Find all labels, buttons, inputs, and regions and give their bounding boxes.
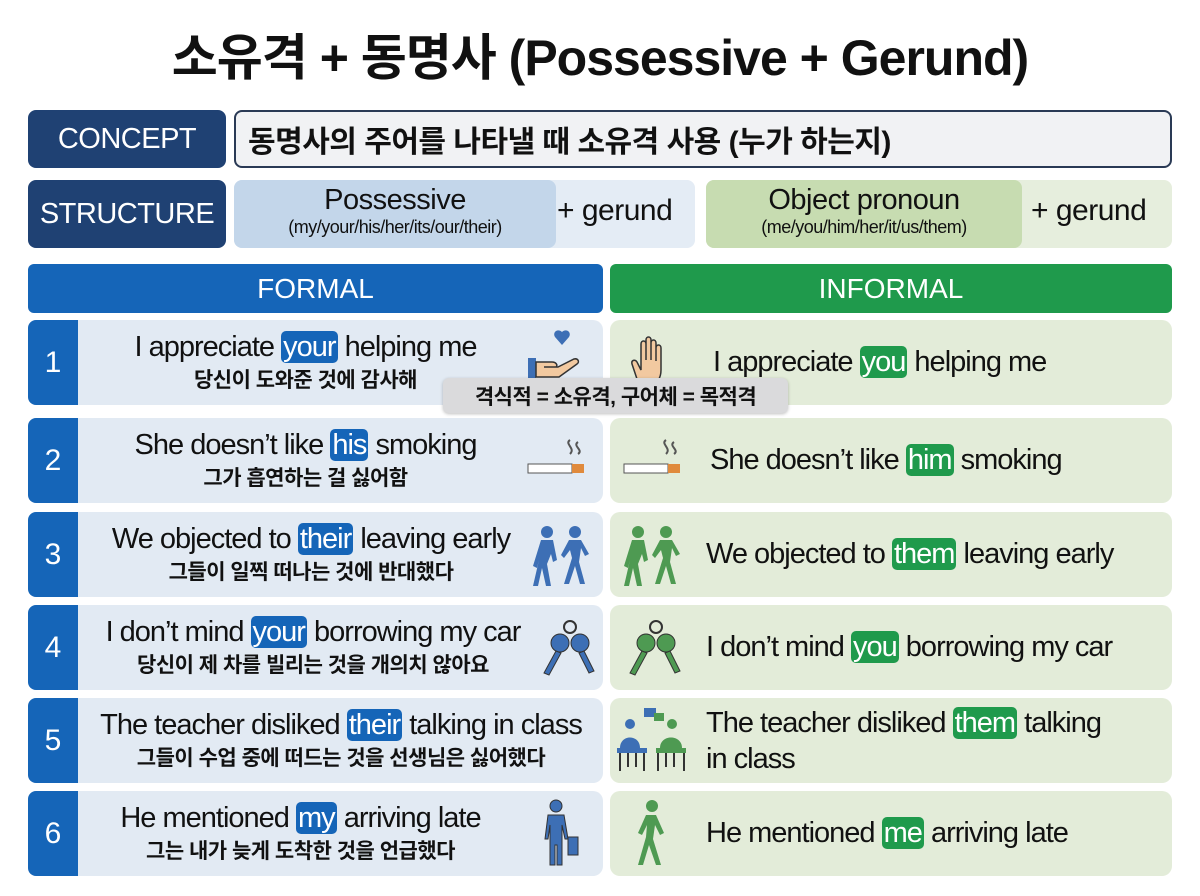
concept box — [234, 110, 1172, 168]
header: informal: INFORMAL — [819, 272, 963, 304]
row 5 informal: in class — [706, 742, 795, 774]
structure: possessive: Possessive — [324, 184, 466, 216]
label: concept — [28, 110, 226, 168]
label: structure: STRUCTURE — [40, 198, 214, 230]
icon: walking person — [638, 800, 664, 865]
row 3 informal — [610, 512, 1172, 597]
icon: classroom — [617, 708, 686, 771]
row 4 formal — [28, 605, 603, 690]
icon: hand — [631, 336, 662, 378]
structure: object: (me/you/him/her/it/us/them) — [761, 217, 967, 237]
row 1 informal: I appreciate you helping me — [713, 346, 1046, 378]
row 3 formal: We objected to their leaving early — [112, 523, 510, 555]
icon: cigarette — [528, 439, 584, 474]
row 2 formal: She doesn’t like his smoking — [135, 429, 476, 461]
icon: keys green — [629, 620, 681, 676]
structure: object — [706, 180, 1172, 248]
row 6 formal: 6 — [45, 816, 61, 850]
row 4 formal: 4 — [45, 630, 61, 664]
row 3 formal: 3 — [45, 538, 61, 570]
row 6 informal — [610, 791, 1172, 876]
row 1 formal: 당신이 도와준 것에 감사해 — [194, 369, 417, 392]
row 6 formal — [28, 791, 603, 876]
row 2 informal — [610, 418, 1172, 503]
icon: two people walking — [533, 526, 589, 586]
structure: object: + gerund — [1031, 194, 1146, 227]
row 2 formal: 2 — [45, 444, 61, 476]
label: structure — [28, 180, 226, 248]
row 2 formal — [28, 418, 603, 503]
row 6 informal: He mentioned me arriving late — [706, 817, 1068, 849]
row 1 informal — [610, 320, 1172, 405]
row 1 formal: 1 — [45, 346, 61, 378]
callout: 격식적 = 소유격, 구어체 = 목적격 — [475, 386, 756, 408]
structure: possessive: (my/your/his/her/its/our/their) — [288, 217, 502, 237]
row 5 formal: The teacher disliked their talking in class — [100, 709, 582, 741]
row 4 formal: I don’t mind your borrowing my car — [106, 616, 520, 648]
icon: keys — [543, 620, 595, 676]
header: formal — [28, 264, 603, 313]
icon: people green — [624, 526, 680, 586]
row 1 formal: I appreciate your helping me — [135, 331, 476, 363]
icon: person with bag — [544, 800, 578, 866]
row 3 formal: 그들이 일찍 떠나는 것에 반대했다 — [169, 561, 453, 584]
structure: possessive — [234, 180, 695, 248]
header: informal — [610, 264, 1172, 313]
icon: hand heart — [528, 330, 580, 378]
callout — [443, 378, 788, 413]
row 4 informal — [610, 605, 1172, 690]
row 4 formal: 당신이 제 차를 빌리는 것을 개의치 않아요 — [137, 654, 489, 677]
row 2 formal: 그가 흡연하는 걸 싫어함 — [203, 467, 408, 490]
icon: cigarette — [624, 439, 680, 474]
row 3 formal — [28, 512, 603, 597]
title: 소유격 + 동명사 (Possessive + Gerund) — [172, 30, 1028, 86]
row 5 formal: 5 — [45, 724, 61, 756]
row 1 formal — [28, 320, 603, 405]
row 5 informal: The teacher disliked them talking — [706, 706, 1101, 738]
row 4 informal: I don’t mind you borrowing my car — [706, 631, 1112, 663]
row 6 formal: 그는 내가 늦게 도착한 것을 언급했다 — [146, 840, 455, 863]
structure: object: Object pronoun — [768, 184, 960, 216]
row 2 informal: She doesn’t like him smoking — [710, 444, 1062, 476]
row 3 informal: We objected to them leaving early — [706, 538, 1113, 570]
concept box: 동명사의 주어를 나타낼 때 소유격 사용 (누가 하는지) — [248, 126, 891, 159]
row 5 informal — [610, 698, 1172, 783]
row 5 formal — [28, 698, 603, 783]
structure: possessive: + gerund — [557, 194, 672, 227]
header: formal: FORMAL — [257, 272, 374, 304]
row 5 formal: 그들이 수업 중에 떠드는 것을 선생님은 싫어했다 — [137, 747, 545, 770]
row 6 formal: He mentioned my arriving late — [120, 802, 481, 834]
label: concept: CONCEPT — [58, 122, 196, 154]
